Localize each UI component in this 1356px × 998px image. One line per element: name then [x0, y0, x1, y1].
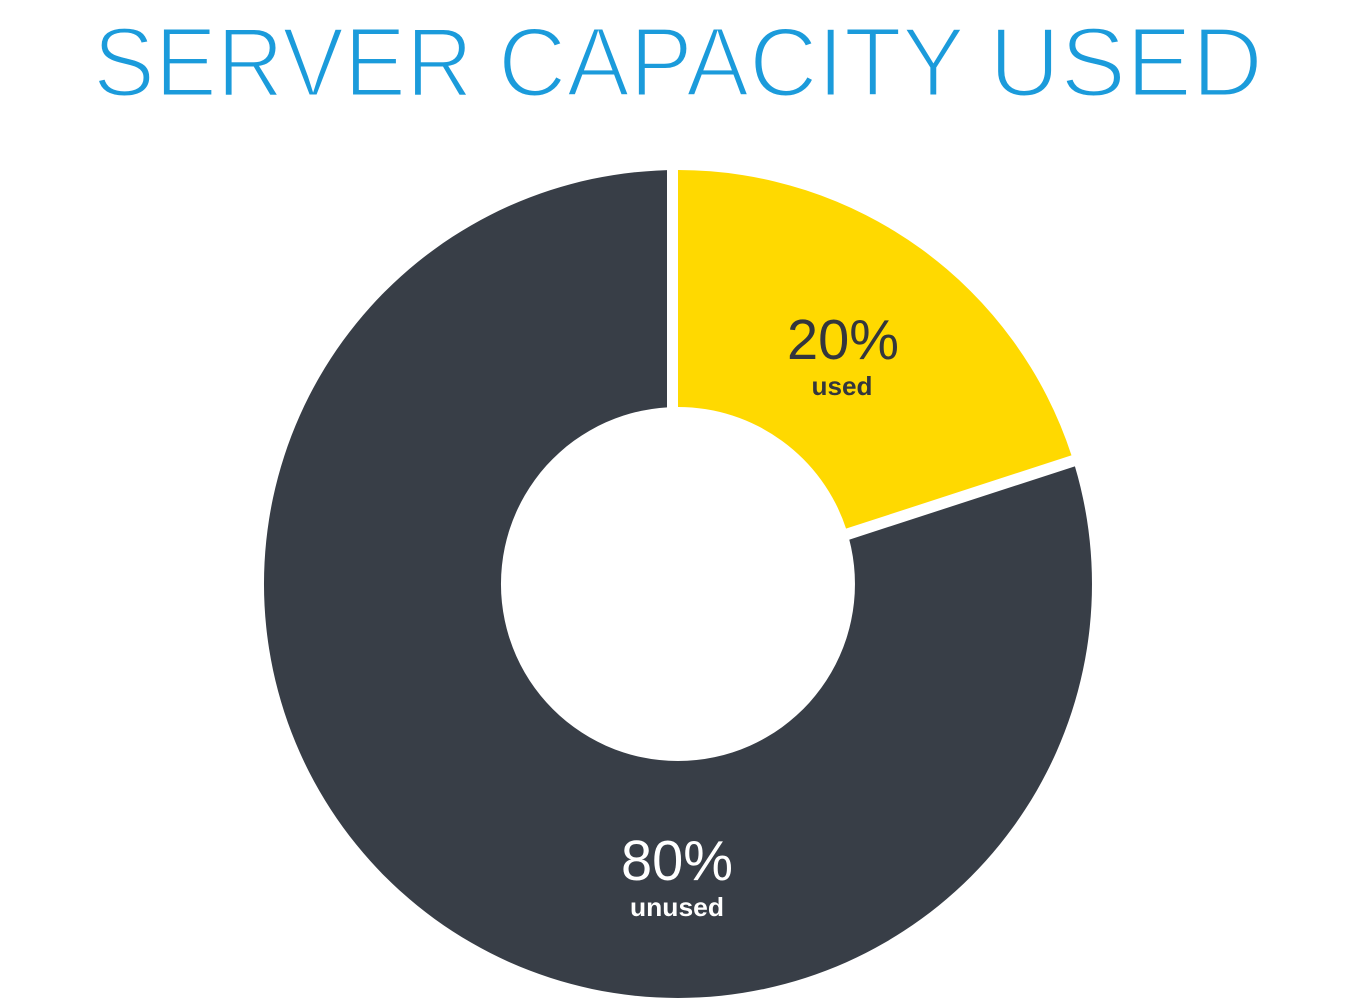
label: 20% used: 20%	[787, 308, 899, 372]
title	[93, 7, 1263, 117]
label: 80% unused: 80%	[621, 829, 733, 893]
segment: 20% used	[678, 170, 1072, 529]
title: USED	[989, 7, 1263, 117]
title: SERVER	[93, 7, 473, 117]
label: 80% unused	[621, 829, 733, 922]
title: CAPACITY	[498, 7, 965, 117]
segment: 80% unused	[264, 170, 1092, 998]
label: 80% unused: unused	[630, 892, 724, 922]
label: 20% used	[787, 308, 899, 401]
label: 20% used: used	[812, 371, 872, 401]
donut chart	[264, 160, 1092, 998]
